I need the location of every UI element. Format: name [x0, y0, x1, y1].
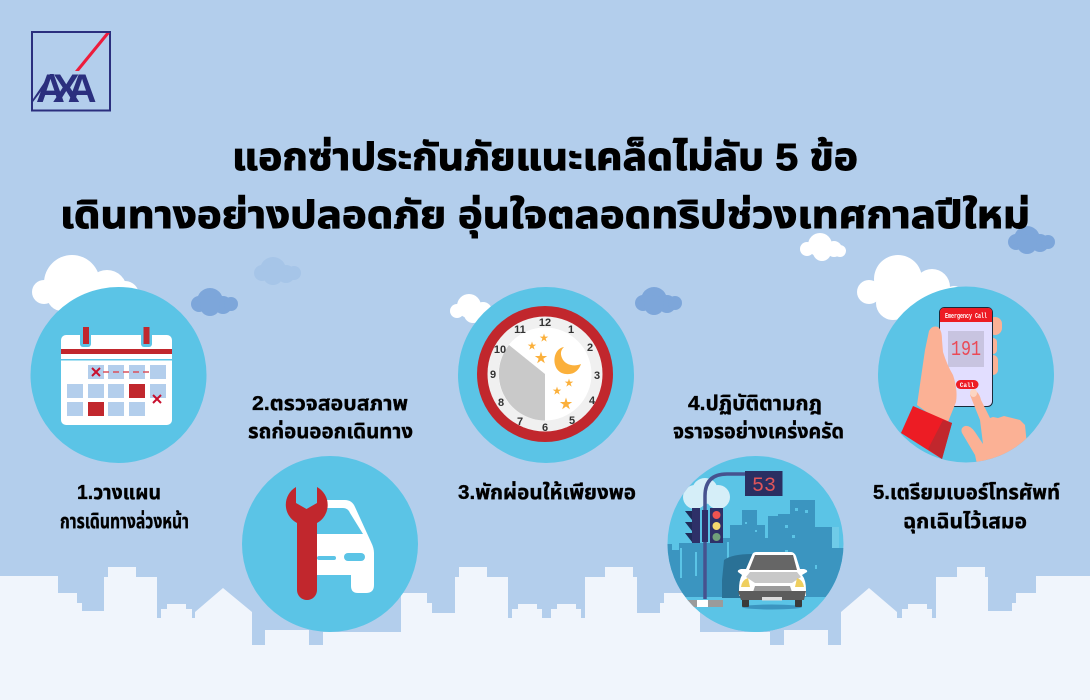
- step 4: traffic circle: [667, 456, 845, 633]
- pole: [705, 474, 746, 599]
- cloud: white middle: [450, 294, 492, 323]
- icon: phone: 191: [951, 339, 981, 362]
- icon: clock: 11: [514, 324, 526, 336]
- icon: clock: 2: [587, 342, 593, 354]
- stars: [528, 334, 573, 409]
- icon: calendar: [61, 327, 172, 425]
- icon: car: [317, 500, 374, 593]
- cloud: pale blue: [254, 257, 301, 285]
- icon: phone: Emergency Call: [945, 313, 987, 321]
- cloud: white upper right: [800, 233, 846, 261]
- icon: clock: 10: [494, 344, 506, 356]
- icon: clock: 12: [539, 317, 551, 329]
- icon: clock: 7: [517, 416, 523, 428]
- step 4 label: จราจรอย่างเคร่งครัด: [673, 421, 844, 443]
- cloud: white right: [857, 255, 965, 320]
- icon: clock: 3: [594, 370, 600, 382]
- icon: clock: 8: [498, 397, 504, 409]
- logo: [32, 32, 110, 111]
- step 3: clock circle: [458, 287, 634, 463]
- car headlight: [344, 553, 365, 561]
- skyline: [0, 567, 1090, 700]
- fingers behind phone: [988, 317, 1002, 375]
- step 4 label: 4.ปฏิบัติตามกฎ: [688, 393, 822, 415]
- title: [60, 137, 1030, 238]
- icon: phone: Call: [960, 382, 975, 389]
- ground: [686, 597, 826, 632]
- icon: clock: 4: [589, 395, 596, 407]
- step 5 label: 5.เตรียมเบอร์โทรศัพท์: [873, 482, 1060, 504]
- city buildings: [667, 500, 845, 597]
- step 2: car and wrench circle: [242, 456, 418, 632]
- logo: AXA: [36, 67, 96, 111]
- countdown sign: 53: [752, 475, 776, 498]
- step 4 label: [673, 393, 844, 443]
- building windows: [680, 508, 839, 578]
- icon: phone: [940, 308, 992, 406]
- title: แอกซ่าประกันภัยแนะเคล็ดไม่ลับ 5 ข้อ: [232, 137, 858, 179]
- back car: [722, 554, 752, 598]
- step 1: calendar circle: [30, 287, 206, 463]
- cloud: dark blue 2: [635, 287, 682, 315]
- cloud: dark blue 3: [1008, 226, 1055, 254]
- countdown sign: [745, 471, 782, 498]
- cloud behind traffic light: [683, 478, 730, 509]
- sleeve: [901, 406, 952, 459]
- right hand: [961, 389, 1027, 464]
- icon: clock: 9: [490, 369, 496, 381]
- step 3 label: 3.พักผ่อนให้เพียงพอ: [458, 482, 636, 504]
- traffic light: [685, 508, 723, 543]
- step 2 label: 2.ตรวจสอบสภาพ: [252, 393, 408, 415]
- step 5 label: ฉุกเฉินไว้เสมอ: [903, 511, 1027, 533]
- step 2 label: [248, 393, 413, 443]
- base: [687, 600, 723, 607]
- icon: clock: 5: [569, 415, 575, 427]
- step 1 label: [60, 482, 189, 533]
- step 1 label: การเดินทางล่วงหน้า: [60, 511, 189, 533]
- step 2 label: รถก่อนออกเดินทาง: [248, 421, 413, 443]
- moon: [554, 347, 581, 374]
- step 5: phone circle: [878, 286, 1054, 464]
- cloud: white left: [32, 255, 139, 311]
- car grill: [317, 556, 336, 560]
- title: เดินทางอย่างปลอดภัย อุ่นใจตลอดทริปช่วงเทศกาลปีใหม่: [60, 195, 1030, 238]
- car: [738, 552, 807, 610]
- cloud: dark blue 1: [191, 288, 238, 316]
- icon: clock: 6: [542, 422, 548, 434]
- icon: clock: [477, 306, 613, 442]
- icon: wrench: [286, 487, 328, 600]
- left hand: [917, 326, 957, 422]
- step 5 label: [873, 482, 1060, 533]
- icon: clock: 1: [568, 324, 574, 336]
- step 1 label: 1.วางแผน: [77, 482, 161, 504]
